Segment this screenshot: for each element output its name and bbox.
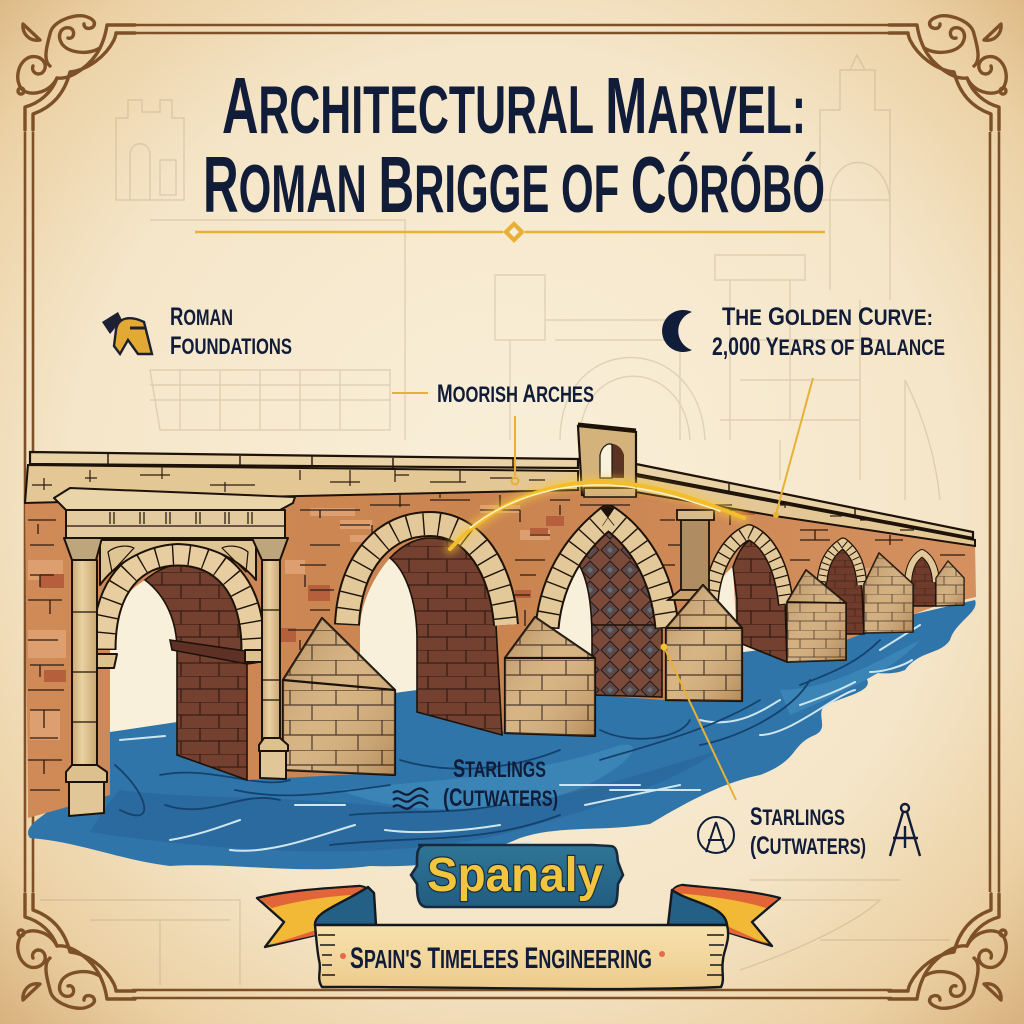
golden curve (450, 482, 744, 549)
label text: ROMAN (170, 303, 251, 331)
pier 5 (864, 553, 913, 633)
plaque: Spanaly: Spanaly (427, 849, 603, 902)
banner ribbon (257, 885, 780, 989)
icon: circled A (698, 817, 734, 853)
vault brickwork (145, 527, 936, 780)
cutwater piers (283, 553, 964, 775)
right fold (668, 890, 727, 925)
label: the golden curve (662, 303, 945, 518)
label text: STARLINGS (453, 755, 576, 783)
entablature (66, 510, 285, 538)
icon: drafting compass (890, 804, 920, 856)
pier 1 (283, 618, 395, 775)
label text: MOORISH ARCHES (437, 380, 594, 408)
left ribbon tail (257, 886, 372, 947)
icon: crescent moon (662, 310, 692, 352)
icon: waves (393, 788, 428, 809)
small tower on parapet (578, 424, 636, 497)
upper stone band (25, 465, 975, 546)
label text: FOUNDATIONS (170, 332, 328, 360)
spandrel (100, 540, 256, 585)
parapet coping (30, 452, 973, 538)
arch rings (104, 517, 936, 650)
pier 2 (505, 617, 595, 736)
pier 4 (787, 570, 846, 662)
pier 6 (936, 561, 964, 606)
leader line (776, 378, 813, 514)
river (28, 600, 976, 869)
corner ornament: top right (889, 16, 1006, 130)
label: starlings with compass (660, 644, 920, 860)
tall buttress pillar (668, 510, 714, 600)
ribbon edge hatching (318, 935, 724, 975)
corner ornament: bottom right (889, 894, 1006, 1008)
water ripples (115, 640, 880, 845)
ribbon text: SPAIN'S TIMELEES ENGINEERING (350, 942, 652, 975)
left capital (64, 538, 102, 560)
left column (72, 560, 97, 768)
water highlights (120, 625, 920, 858)
label text: (CUTWATERS) (443, 784, 592, 812)
title (203, 61, 825, 229)
left base (66, 765, 107, 782)
brick wall (25, 452, 976, 818)
leader line (392, 393, 515, 476)
classical portal (54, 488, 295, 816)
label: starlings on water (393, 755, 558, 812)
label text: STARLINGS (750, 803, 873, 831)
right capital (252, 538, 288, 560)
paper seen through arch openings (110, 558, 737, 740)
ribbon bullets (340, 951, 665, 959)
pier 3 (666, 585, 742, 701)
corner ornament: top left (18, 16, 135, 130)
corner ornament: bottom left (18, 894, 135, 1008)
title underline with diamond (195, 221, 825, 243)
main ribbon (315, 925, 728, 989)
label text: THE GOLDEN CURVE: (722, 303, 942, 331)
right base (259, 738, 288, 751)
cornice (54, 488, 295, 510)
band block lines (32, 465, 914, 530)
label: roman foundations (102, 303, 292, 360)
lighter water patches (340, 640, 920, 809)
label text: 2,000 YEARS OF BALANCE (712, 333, 966, 361)
title line 1: ARCHITECTURAL MARVEL: (222, 61, 806, 150)
impost (97, 650, 262, 668)
coloured bricks (28, 505, 880, 740)
label text: (CUTWATERS) (750, 832, 899, 860)
title line 2: ROMAN BRIGGE OF CÓRÓBÓ (203, 140, 825, 229)
label: moorish arches (392, 380, 594, 484)
wall brick mortar lines (28, 495, 965, 790)
icon: roman helmet (102, 312, 152, 354)
darker water patches (90, 750, 720, 851)
right column (262, 560, 280, 740)
left fold (315, 887, 376, 925)
right ribbon tail (671, 885, 780, 946)
leader line (664, 647, 736, 800)
bridge (25, 424, 976, 818)
